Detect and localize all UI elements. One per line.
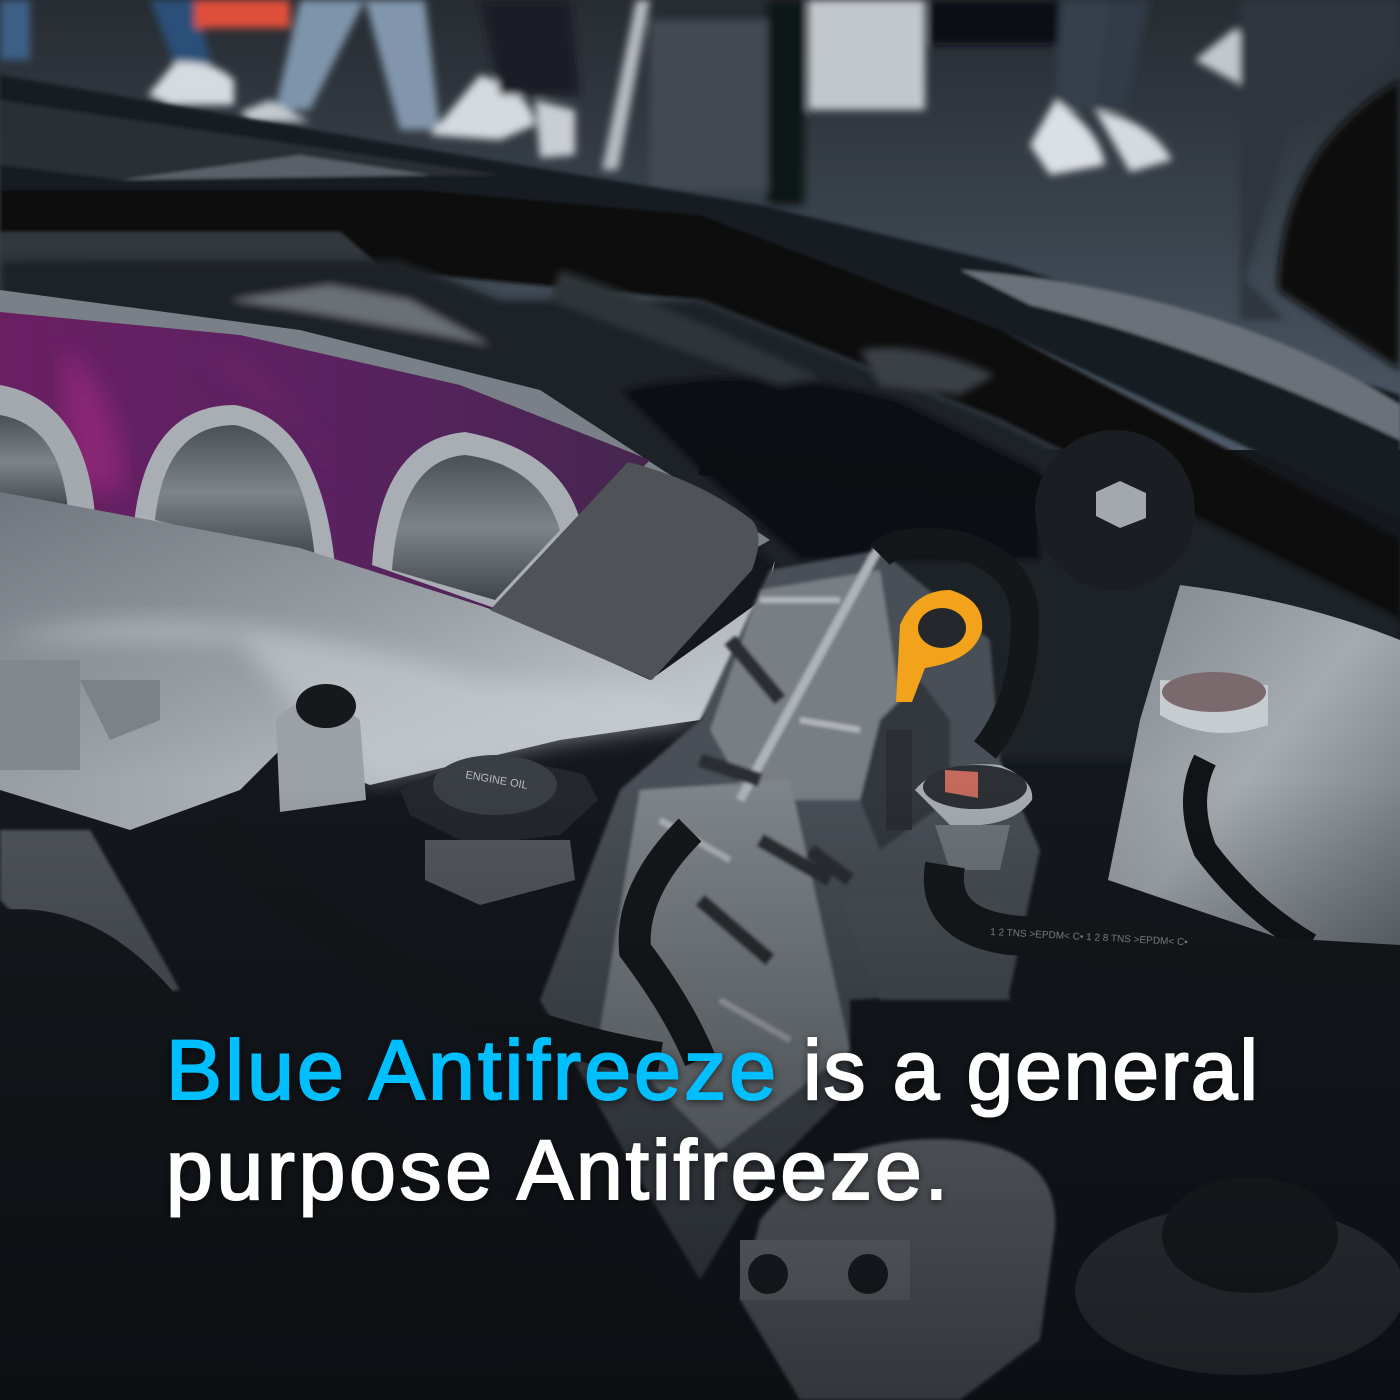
- long coolant hose with print: [944, 865, 1400, 965]
- headline line 2: purpose: [166, 1123, 492, 1217]
- purple manifold cover: [0, 290, 770, 610]
- headline line 2: [166, 1123, 948, 1217]
- background: crowd and ground: [0, 0, 1400, 450]
- bottom darkening overlay: [0, 780, 1400, 1400]
- hood edge bands: [0, 75, 1400, 620]
- air intake ducts: [0, 385, 580, 610]
- radiator cap with warning label: [915, 764, 1032, 870]
- black oil cap: ENGINE OIL: [464, 769, 529, 792]
- black oil cap: [400, 755, 598, 905]
- headline line 2: Antifreeze.: [517, 1123, 948, 1217]
- lower right components: [740, 1139, 1400, 1400]
- pipe and cap top right: [700, 430, 1195, 590]
- lower left hoses and turbo pipe: [0, 825, 900, 1400]
- headline line 1: is a general: [803, 1023, 1258, 1117]
- orange dipstick handle: [886, 590, 982, 830]
- headline line 1: Blue Antifreeze: [166, 1023, 776, 1117]
- central engine block: [540, 545, 1040, 1280]
- silver intake body: [0, 492, 775, 830]
- dark grey cover plate: [490, 462, 758, 680]
- coolant reservoir tank: [1108, 585, 1400, 945]
- long coolant hose with print: 1 2 TNS >EPDM< C• 1 2 8 TNS >EPDM< C•: [990, 927, 1188, 948]
- headline text: [166, 1023, 1258, 1217]
- upper engine bay shadows: [0, 260, 1400, 760]
- headline line 1: [166, 1023, 1258, 1117]
- hose: top coolant loop: [880, 542, 1025, 750]
